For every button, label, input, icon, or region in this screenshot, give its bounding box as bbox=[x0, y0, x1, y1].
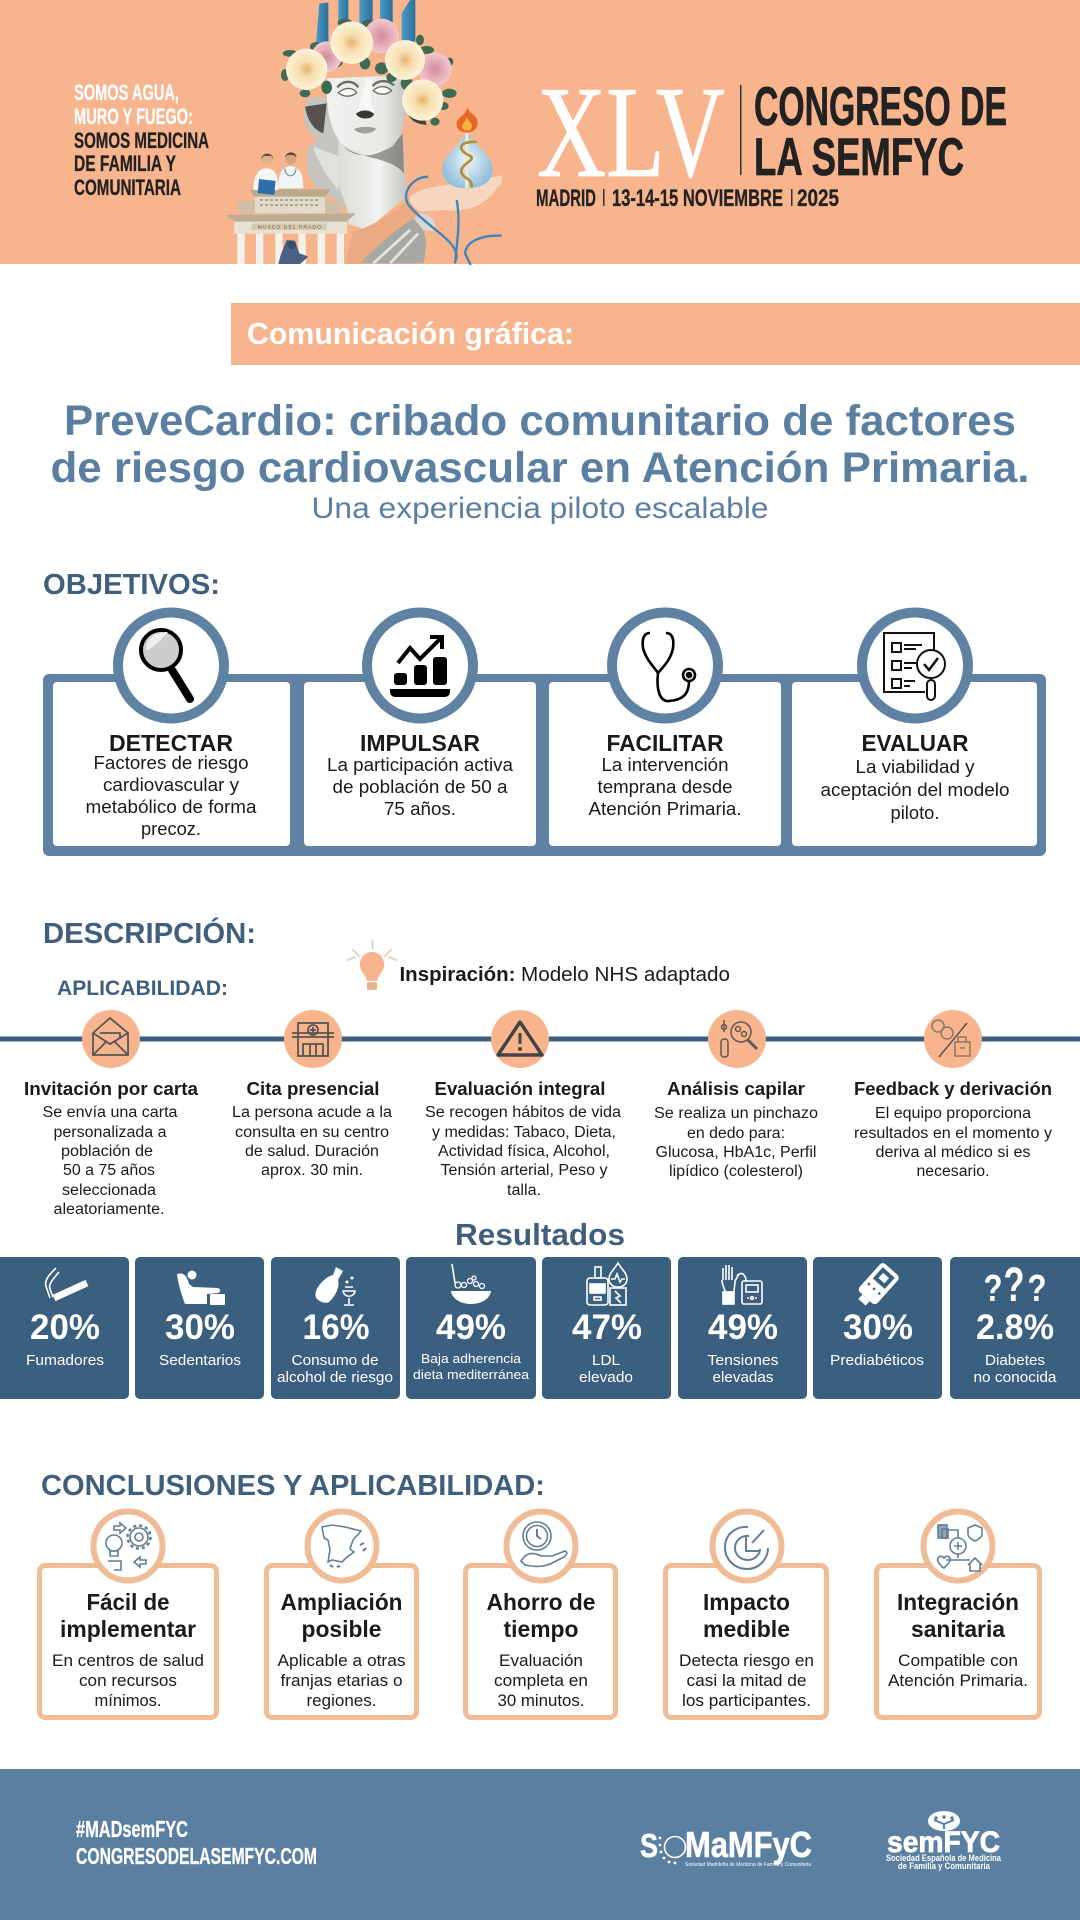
logo: semfyc bbox=[886, 1811, 1002, 1871]
card: ahorro de tiempo: Evaluación bbox=[499, 1652, 583, 1670]
face bbox=[327, 75, 407, 152]
text: evaluar: La viabilidad y bbox=[856, 756, 975, 777]
card: impacto medible: Detecta riesgo en bbox=[679, 1652, 814, 1670]
timeline line bbox=[0, 1036, 1080, 1042]
step: feedback y derivacion bbox=[854, 1079, 1052, 1180]
stat: prediabeticos: 30% bbox=[843, 1308, 913, 1347]
text: evaluar: piloto. bbox=[890, 802, 940, 823]
stat: sedentarios: 30% bbox=[165, 1308, 235, 1347]
text: facilitar: La intervención bbox=[602, 754, 728, 775]
stat: ldl: 47% bbox=[572, 1308, 642, 1347]
panel: objetivos bbox=[43, 612, 1046, 856]
card: facil de implementar: implementar bbox=[60, 1616, 196, 1642]
step: cita presencial: de salud. Duración bbox=[245, 1143, 379, 1160]
card: impacto medible: Impacto bbox=[703, 1589, 790, 1615]
step circles and icons bbox=[82, 1010, 982, 1068]
icon: glucometer and drop bbox=[587, 1263, 627, 1305]
card: integracion sanitaria: Compatible con bbox=[898, 1652, 1018, 1670]
card: integracion sanitaria bbox=[876, 1512, 1040, 1718]
stat: diabetes: 2.8% bbox=[976, 1308, 1054, 1347]
stat: prediabeticos bbox=[813, 1257, 942, 1399]
step: analisis capilar: lipídico (colesterol) bbox=[669, 1163, 803, 1180]
step: feedback y derivacion: Feedback y derivación bbox=[854, 1079, 1052, 1099]
icon: stethoscope bbox=[643, 633, 695, 701]
step: evaluacion integral bbox=[425, 1079, 621, 1199]
congress title: XLV bbox=[537, 60, 725, 205]
card: impacto medible: medible bbox=[703, 1616, 790, 1642]
statue collage illustration bbox=[225, 0, 502, 265]
card: facil de implementar bbox=[40, 1512, 216, 1718]
card: ampliacion posible: Aplicable a otras bbox=[278, 1652, 406, 1670]
heading: objetivos: OBJETIVOS: bbox=[43, 569, 220, 601]
text: facilitar: FACILITAR bbox=[606, 730, 724, 756]
stat: ldl: LDL bbox=[592, 1353, 620, 1369]
main title: Una experiencia piloto escalable bbox=[312, 492, 768, 525]
logo: semfyc: Sociedad Española de Medicina bbox=[886, 1853, 1002, 1863]
text: impulsar: de población de 50 a bbox=[332, 776, 508, 797]
text: impulsar bbox=[327, 730, 514, 819]
step: evaluacion integral: Actividad física, Alcohol, bbox=[438, 1143, 610, 1160]
text: evaluar: EVALUAR bbox=[862, 730, 969, 756]
icon: cigarette bbox=[46, 1268, 87, 1298]
icon: question marks bbox=[984, 1259, 1046, 1312]
slogan bbox=[74, 80, 209, 200]
card: impacto medible: casi la mitad de bbox=[686, 1672, 806, 1690]
congress title: LA SEMFYC bbox=[754, 128, 964, 187]
icon: question marks: ? bbox=[1028, 1268, 1046, 1310]
museum building bbox=[225, 189, 356, 264]
stat: prediabeticos: Prediabéticos bbox=[830, 1353, 924, 1369]
text: detectar: metabólico de forma bbox=[86, 796, 257, 817]
icon: feedback bbox=[932, 1020, 970, 1057]
footer text: CONGRESODELASEMFYC.COM bbox=[76, 1843, 317, 1869]
icon: checklist bbox=[884, 633, 945, 700]
icon: health network bbox=[938, 1525, 982, 1571]
stat: alcohol bbox=[271, 1257, 400, 1399]
card: integracion sanitaria: Integración bbox=[897, 1589, 1019, 1615]
icon: bowl bbox=[451, 1264, 491, 1304]
stat: sedentarios: Sedentarios bbox=[159, 1353, 241, 1369]
text: detectar: Factores de riesgo bbox=[94, 752, 248, 773]
card: ampliacion posible: Ampliación bbox=[280, 1589, 402, 1615]
slogan: COMUNITARIA bbox=[74, 175, 181, 200]
slogan: SOMOS AGUA, bbox=[74, 80, 179, 105]
icon: test meter bbox=[853, 1262, 900, 1310]
congress title bbox=[536, 60, 1007, 212]
stat: ldl: elevado bbox=[579, 1370, 633, 1386]
logo: somamfyc: S bbox=[640, 1827, 658, 1864]
icon: bottle and glass bbox=[315, 1267, 355, 1305]
icon: clock on hand bbox=[521, 1522, 567, 1566]
step: evaluacion integral: y medidas: Tabaco, Dieta, bbox=[432, 1124, 616, 1141]
step: evaluacion integral: talla. bbox=[507, 1182, 541, 1199]
heading: resultados: Resultados bbox=[455, 1217, 625, 1252]
card: facil de implementar: En centros de salud bbox=[52, 1652, 204, 1670]
congress title: MADRID bbox=[536, 185, 596, 212]
icon: capillary test bbox=[721, 1020, 757, 1057]
inspiration text bbox=[400, 963, 730, 986]
step: analisis capilar: en dedo para: bbox=[687, 1125, 785, 1142]
doctors bbox=[253, 152, 303, 195]
inspiration text: Modelo NHS adaptado bbox=[521, 963, 730, 986]
text: impulsar: 75 años. bbox=[384, 798, 456, 819]
stat: tensiones bbox=[678, 1257, 807, 1399]
communication banner bbox=[231, 303, 1080, 365]
neck bbox=[338, 133, 407, 230]
slogan: DE FAMILIA Y bbox=[74, 151, 176, 176]
step: invitacion por carta: personalizada a bbox=[54, 1124, 167, 1141]
step: invitacion por carta bbox=[24, 1079, 199, 1218]
step: feedback y derivacion: El equipo proporciona bbox=[875, 1105, 1031, 1122]
hair bbox=[304, 97, 357, 213]
step: invitacion por carta: 50 a 75 años bbox=[63, 1162, 155, 1179]
communication banner: Comunicación gráfica: bbox=[247, 317, 574, 351]
stat: alcohol: 16% bbox=[302, 1308, 370, 1347]
main title bbox=[50, 397, 1030, 525]
step: cita presencial bbox=[232, 1079, 392, 1179]
card: facil de implementar: con recursos bbox=[79, 1672, 177, 1690]
step: invitacion por carta: aleatoriamente. bbox=[54, 1201, 164, 1218]
stat: ldl bbox=[542, 1257, 671, 1399]
step: cita presencial: aprox. 30 min. bbox=[261, 1162, 363, 1179]
stat: dieta: 49% bbox=[436, 1308, 506, 1347]
icon: bulb and gear bbox=[106, 1523, 150, 1570]
text: detectar bbox=[86, 730, 257, 839]
text: detectar: precoz. bbox=[141, 818, 201, 839]
card: facil de implementar: Fácil de bbox=[86, 1589, 170, 1615]
step: evaluacion integral: Se recogen hábitos de vida bbox=[425, 1104, 621, 1121]
text: impulsar: La participación activa bbox=[327, 754, 514, 775]
card: ampliacion posible: posible bbox=[302, 1616, 382, 1642]
stat: alcohol: alcohol de riesgo bbox=[277, 1370, 393, 1386]
icon: lightbulb bbox=[348, 941, 396, 990]
card: integracion sanitaria: sanitaria bbox=[911, 1616, 1005, 1642]
museum building: MUSEO DEL PRADO bbox=[258, 224, 321, 230]
stat: diabetes: Diabetes bbox=[985, 1353, 1045, 1369]
icon: magnifier bbox=[141, 630, 190, 699]
step: analisis capilar: Glucosa, HbA1c, Perfil bbox=[656, 1144, 816, 1161]
step: feedback y derivacion: resultados en el momento y bbox=[854, 1125, 1052, 1142]
stat: tensiones: Tensiones bbox=[708, 1353, 778, 1369]
step: evaluacion integral: Tensión arterial, Peso y bbox=[440, 1162, 608, 1179]
step: feedback y derivacion: deriva al médico si es bbox=[876, 1144, 1031, 1161]
step: cita presencial: Cita presencial bbox=[246, 1079, 380, 1099]
stat: dieta: dieta mediterránea bbox=[413, 1367, 530, 1382]
card: ahorro de tiempo: completa en bbox=[494, 1672, 588, 1690]
icon: map of spain bbox=[322, 1525, 366, 1567]
stat: tensiones: 49% bbox=[708, 1308, 778, 1347]
water drop with rod and flame bbox=[442, 132, 493, 188]
card: ahorro de tiempo: tiempo bbox=[504, 1616, 578, 1642]
stat: diabetes bbox=[950, 1257, 1080, 1399]
stat: alcohol: Consumo de bbox=[292, 1353, 378, 1369]
card: impacto medible: los participantes. bbox=[682, 1692, 811, 1710]
card: facil de implementar: mínimos. bbox=[94, 1692, 162, 1710]
step: evaluacion integral: Evaluación integral bbox=[434, 1079, 606, 1099]
card: integracion sanitaria: Atención Primaria. bbox=[888, 1672, 1028, 1690]
text: evaluar bbox=[820, 730, 1010, 823]
heading: conclusiones: CONCLUSIONES Y APLICABILIDAD: bbox=[41, 1470, 545, 1502]
stat: fumadores: Fumadores bbox=[26, 1353, 104, 1369]
card: ampliacion posible: regiones. bbox=[306, 1692, 376, 1710]
card: ahorro de tiempo bbox=[466, 1512, 616, 1718]
stat: diabetes: no conocida bbox=[974, 1370, 1057, 1386]
main title: PreveCardio: cribado comunitario de factores bbox=[64, 397, 1016, 445]
card: ahorro de tiempo: 30 minutos. bbox=[498, 1692, 584, 1710]
step: invitacion por carta: población de bbox=[61, 1143, 153, 1160]
card: impacto medible bbox=[666, 1512, 826, 1718]
header banner bbox=[0, 0, 1080, 265]
step: cita presencial: consulta en su centro bbox=[235, 1124, 389, 1141]
stat: fumadores: 20% bbox=[30, 1308, 100, 1347]
footer text bbox=[76, 1816, 317, 1869]
icon: hospital bbox=[292, 1023, 334, 1056]
text: detectar: cardiovascular y bbox=[103, 774, 240, 795]
stat: fumadores bbox=[0, 1257, 129, 1399]
step: analisis capilar: Se realiza un pinchazo bbox=[654, 1105, 818, 1122]
icon: question marks: ? bbox=[1004, 1259, 1024, 1312]
step: invitacion por carta: Invitación por carta bbox=[24, 1079, 199, 1099]
text: evaluar: aceptación del modelo bbox=[820, 779, 1010, 800]
main title: de riesgo cardiovascular en Atención Primaria. bbox=[50, 444, 1030, 492]
card: ampliacion posible: franjas etarias o bbox=[280, 1672, 402, 1690]
logo: semfyc: semFYC bbox=[887, 1826, 1000, 1859]
skyscrapers bbox=[316, 0, 415, 43]
footer bbox=[0, 1769, 1080, 1920]
slogan: MURO Y FUEGO: bbox=[74, 104, 193, 129]
icon: armchair bbox=[177, 1270, 225, 1305]
stat: dieta: Baja adherencia bbox=[421, 1351, 522, 1366]
step: invitacion por carta: seleccionada bbox=[62, 1182, 156, 1199]
congress title: 13-14-15 NOVIEMBRE bbox=[612, 185, 783, 212]
icon: question marks: ? bbox=[984, 1268, 1002, 1310]
step: invitacion por carta: Se envía una carta bbox=[42, 1104, 178, 1121]
step: cita presencial: La persona acude a la bbox=[232, 1104, 392, 1121]
icon: blood pressure monitor bbox=[722, 1265, 762, 1304]
logo: semfyc: de Familia y Comunitaria bbox=[898, 1861, 991, 1871]
logo: somamfyc: Sociedad Madrileña de Medicina de Familia y Comunitaria bbox=[685, 1862, 811, 1868]
text: facilitar: Atención Primaria. bbox=[588, 798, 742, 819]
footer text: #MADsemFYC bbox=[76, 1816, 188, 1842]
text: facilitar: temprana desde bbox=[598, 776, 732, 797]
icon: growth chart bbox=[390, 637, 450, 697]
logo: somamfyc: MaMFyC bbox=[685, 1824, 812, 1865]
text: detectar: DETECTAR bbox=[109, 730, 233, 756]
step: analisis capilar: Análisis capilar bbox=[667, 1079, 805, 1099]
card: ahorro de tiempo: Ahorro de bbox=[486, 1589, 596, 1615]
heading: descripcion: DESCRIPCIÓN: bbox=[43, 916, 256, 950]
logo: somamfyc bbox=[640, 1824, 812, 1868]
step: feedback y derivacion: necesario. bbox=[916, 1163, 990, 1180]
stat: sedentarios bbox=[135, 1257, 264, 1399]
icon: envelope bbox=[93, 1018, 128, 1055]
stat: dieta bbox=[406, 1257, 536, 1399]
inspiration text: Inspiración: bbox=[400, 963, 516, 986]
slogan: SOMOS MEDICINA bbox=[74, 128, 209, 153]
stethoscope tube bbox=[406, 177, 502, 265]
text: facilitar bbox=[588, 730, 742, 819]
text: impulsar: IMPULSAR bbox=[360, 730, 480, 756]
flower crown bbox=[281, 19, 457, 126]
icon: warning bbox=[498, 1022, 542, 1055]
arm and hand bbox=[345, 175, 502, 264]
stat: tensiones: elevadas bbox=[712, 1370, 774, 1386]
icon: target arrow bbox=[725, 1527, 768, 1569]
step: analisis capilar bbox=[654, 1079, 818, 1180]
subheading: aplicabilidad: APLICABILIDAD: bbox=[57, 977, 228, 1000]
congress title: 2025 bbox=[797, 185, 839, 212]
card: ampliacion posible bbox=[266, 1512, 416, 1718]
